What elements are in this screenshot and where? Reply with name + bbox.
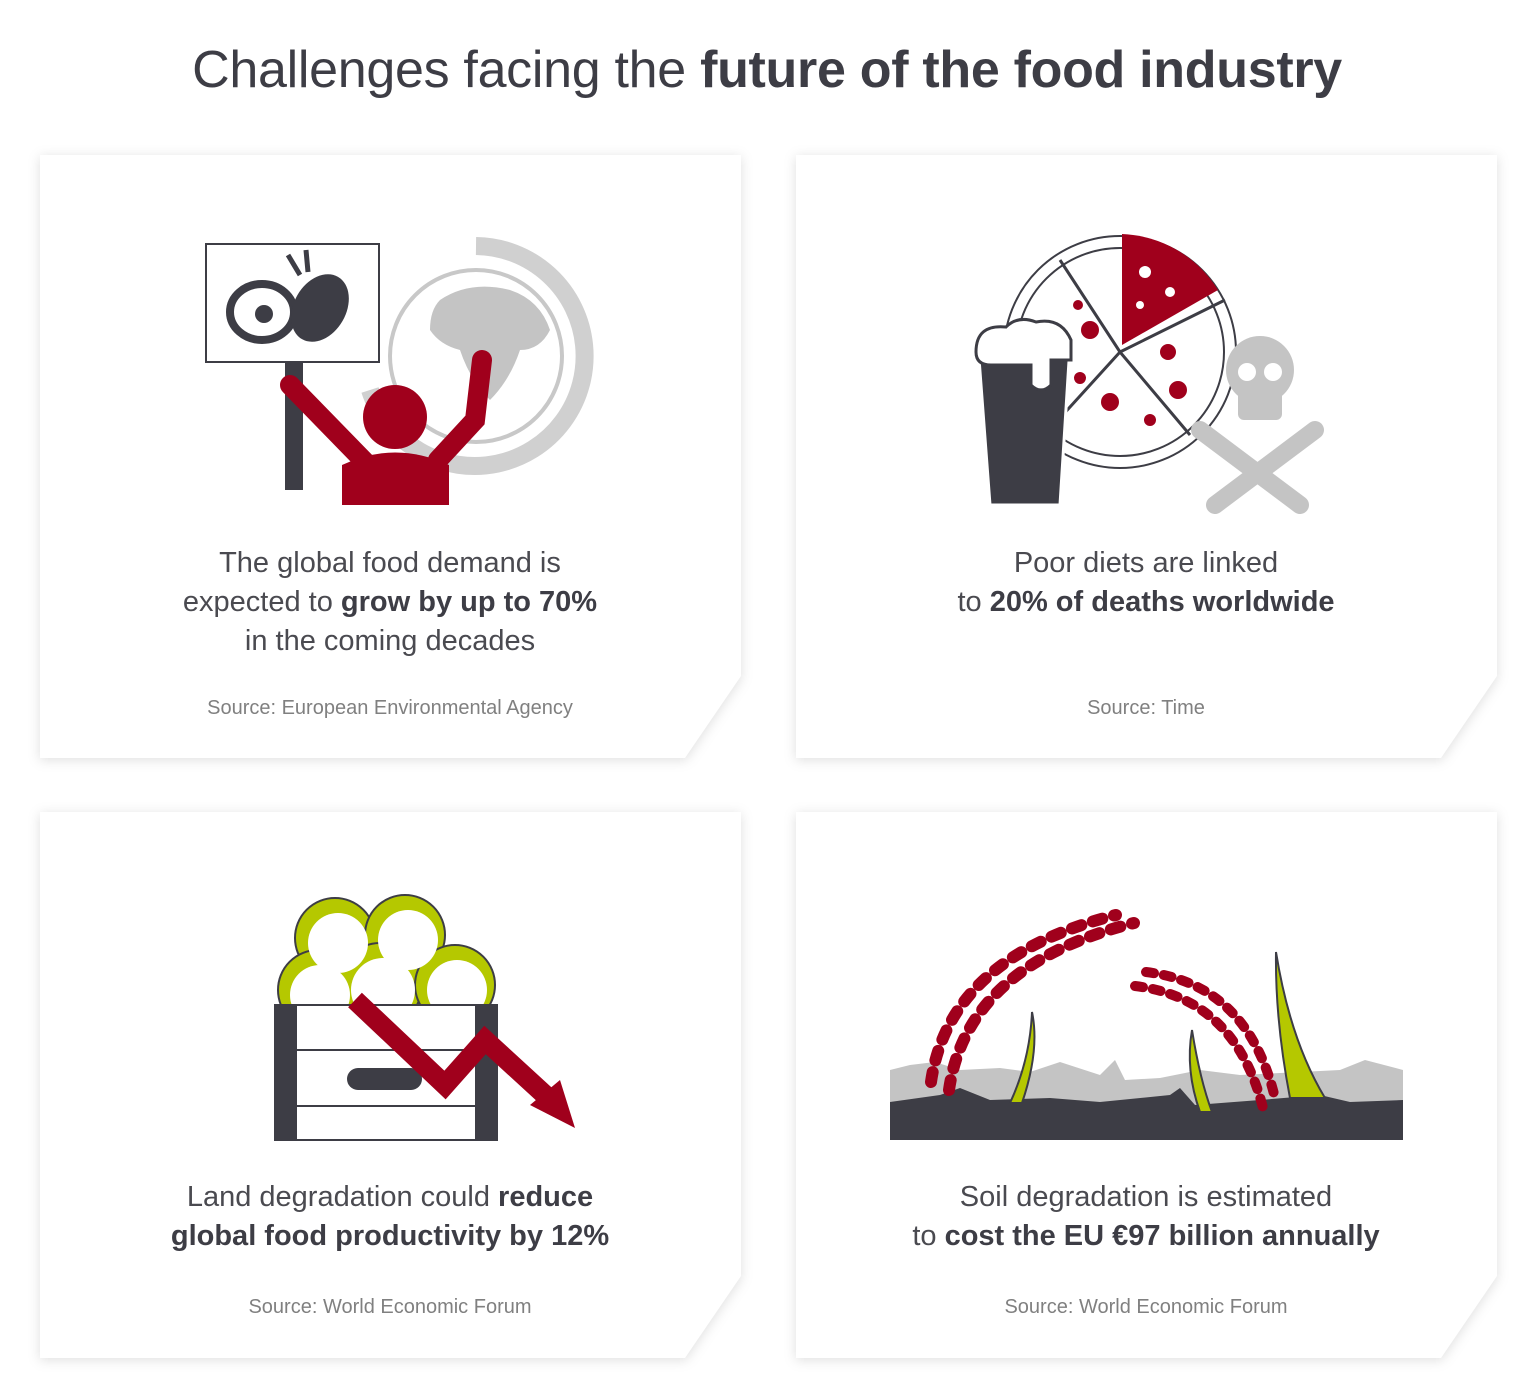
text: soil degradation [912,1181,1380,1252]
icon: wheat on degraded soil [890,915,1403,1140]
text: poor diets [957,547,1335,618]
text: food demand: expected to grow by up to 70% [183,586,597,618]
icon: person with sign and globe [206,244,585,505]
icon: cabbage crate with falling arrow [275,895,575,1140]
source: poor diets: Source: Time [1087,697,1205,719]
text: food demand: in the coming decades [245,625,535,657]
panel: food demand [36,153,745,764]
text: soil degradation: to cost the EU €97 billion annually [912,1220,1380,1252]
text: food demand [183,547,597,657]
text: land degradation: Land degradation could reduce [187,1181,593,1213]
title: Challenges facing the future of the food industry [192,41,1342,99]
text: poor diets: to 20% of deaths worldwide [957,586,1335,618]
icon: pizza, beer and skull [976,234,1315,505]
text: land degradation [171,1181,609,1252]
panel: poor diets [792,153,1501,764]
source: land degradation: Source: World Economic Forum [248,1296,532,1318]
panel: land degradation [36,810,745,1364]
panel: soil degradation [792,810,1501,1364]
source: food demand: Source: European Environmental Agency [207,697,573,719]
text: land degradation: global food productivity by 12% [171,1220,609,1252]
text: poor diets: Poor diets are linked [1014,547,1278,579]
text: soil degradation: Soil degradation is estimated [960,1181,1332,1213]
text: food demand: The global food demand is [219,547,561,579]
source: soil degradation: Source: World Economic Forum [1004,1296,1288,1318]
